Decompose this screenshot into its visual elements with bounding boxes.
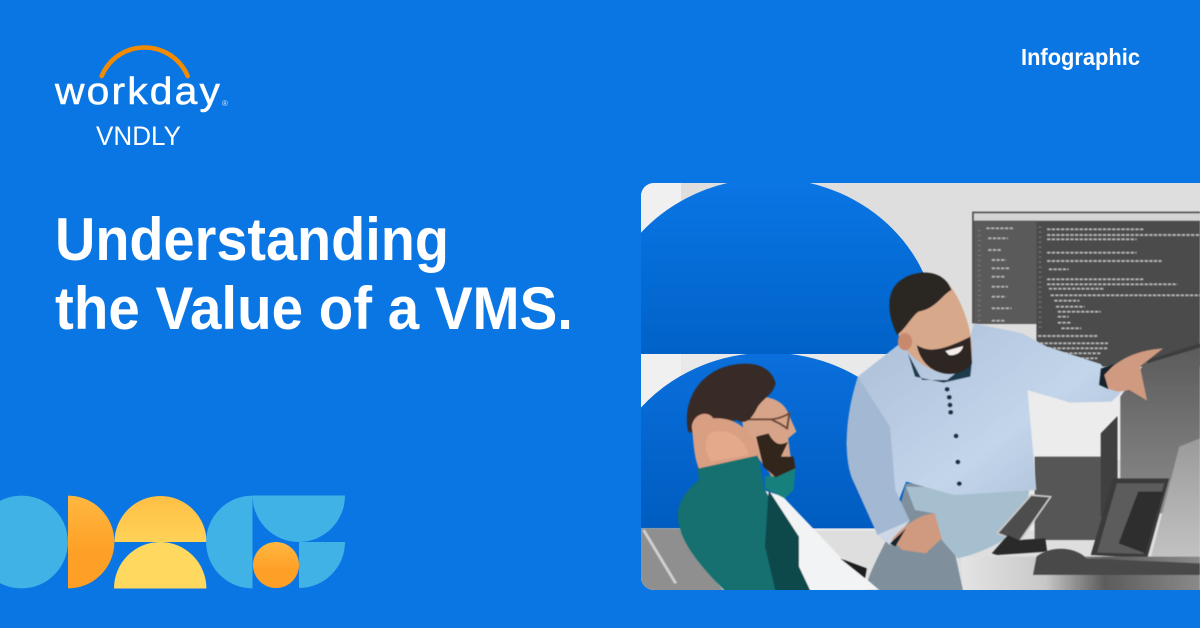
blue dome bottom: [640, 354, 936, 528]
beard: [756, 433, 795, 477]
desk: [961, 557, 1200, 592]
ear: [898, 333, 912, 350]
shape: orange half circle: [68, 496, 114, 588]
logo product name: VNDLY: [96, 121, 181, 151]
shape: yellow bottom dome: [114, 542, 206, 588]
logo wordmark: workday: [54, 71, 222, 113]
logo: Workday VNDLY: [54, 48, 228, 151]
small monitor: [1101, 416, 1117, 517]
raised arm: [692, 414, 760, 468]
back screen: [1035, 457, 1102, 540]
title: [55, 206, 573, 342]
glasses: [744, 413, 789, 428]
title: the Value of a VMS.: [55, 275, 573, 342]
teal shirt: [677, 455, 811, 592]
shape: blue left half circle: [206, 496, 252, 588]
lower leg jeans: [865, 483, 1029, 592]
large grey monitor: [1120, 343, 1200, 513]
hand on monitor: [1101, 348, 1163, 401]
laptop: [1091, 478, 1169, 558]
shape: orange dot: [253, 542, 299, 588]
thigh jeans: [906, 487, 1029, 558]
logo registered mark: ®: [222, 99, 228, 108]
buttons: [945, 387, 962, 486]
shape: blue circle: [0, 496, 68, 588]
chair: [640, 528, 724, 592]
white t-shirt: [763, 490, 879, 592]
hair: [687, 364, 776, 433]
man seated: [677, 364, 879, 592]
hair: [889, 273, 951, 335]
foreground laptop: [1151, 438, 1200, 563]
shape: yellow top dome: [114, 496, 206, 542]
beard: [917, 337, 972, 374]
office wall: [640, 180, 1200, 593]
decorative geometric shapes: [0, 496, 345, 588]
neck and face: [898, 287, 972, 373]
collar: [908, 353, 972, 383]
panel: photo of two colleagues at computers: [640, 180, 1200, 593]
man standing: [846, 273, 1163, 592]
chair back: [840, 558, 867, 578]
shape: blue bottom half circle: [252, 496, 345, 542]
blue dome top: [640, 180, 938, 354]
logo arc: [102, 48, 188, 76]
shape: blue quarter circle: [299, 542, 345, 588]
phone on stand: [992, 495, 1051, 555]
background desk equipment: [640, 343, 1200, 592]
hand on knee: [892, 513, 942, 553]
label: Infographic: Infographic: [1021, 44, 1140, 70]
title: Understanding: [55, 206, 449, 273]
face: [740, 397, 796, 477]
shirt: [846, 322, 1120, 499]
wall monitor with code: [972, 212, 1200, 367]
